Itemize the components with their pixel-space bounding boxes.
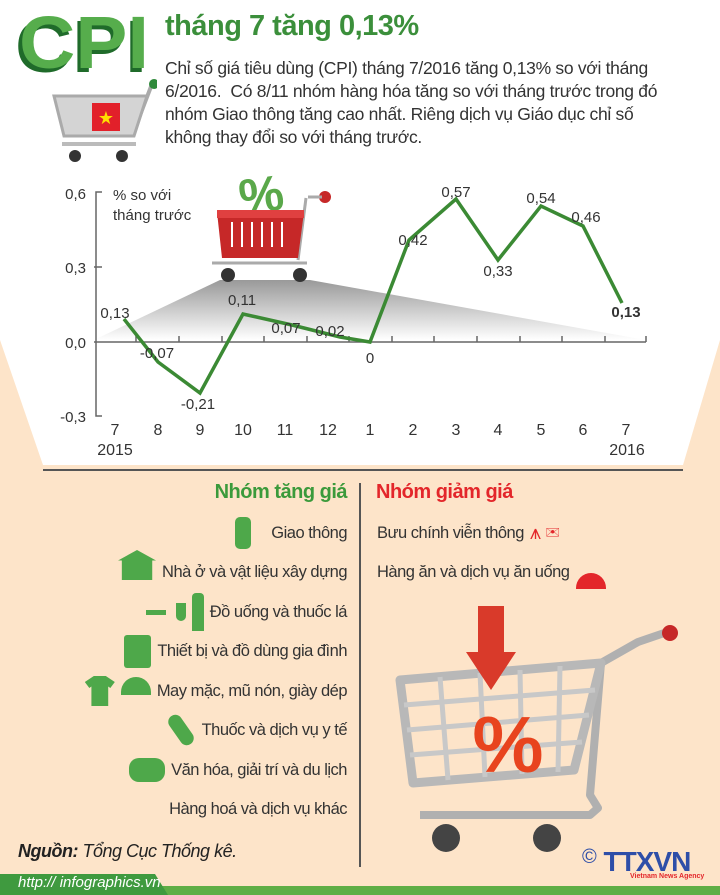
line chart: 2015 bbox=[97, 442, 133, 459]
line chart: -0,07 bbox=[140, 345, 174, 362]
intro text: Chỉ số giá tiêu dùng (CPI) tháng 7/2016 tăng 0,13% so với tháng bbox=[165, 58, 648, 78]
footer url: http:// infographics.vn bbox=[18, 874, 161, 891]
line chart: 0,3 bbox=[65, 260, 86, 277]
logo: TTXVN: © TTXVN bbox=[582, 846, 690, 877]
item: post bbox=[377, 522, 559, 544]
item: appliances bbox=[124, 635, 347, 668]
item: medicine bbox=[168, 714, 348, 746]
item: food: Hàng ăn và dịch vụ ăn uống bbox=[377, 562, 570, 580]
footer bar bbox=[0, 874, 720, 895]
line chart: 0,11 bbox=[228, 292, 256, 309]
line chart: 0,0 bbox=[65, 335, 86, 352]
line chart: 2016 bbox=[609, 442, 645, 459]
item: transport: Giao thông bbox=[271, 524, 347, 542]
item: entertainment bbox=[129, 758, 347, 782]
item: drinks bbox=[146, 593, 348, 631]
line chart: 0,54 bbox=[526, 190, 556, 207]
illustration: big gray cart with percent and down arrow bbox=[396, 606, 678, 852]
line chart: 12 bbox=[319, 422, 337, 439]
logo: CPI with cart bbox=[15, 8, 157, 162]
line chart: 0,42 bbox=[398, 232, 428, 249]
line chart: 4 bbox=[494, 422, 503, 439]
line chart: 0,13 bbox=[611, 304, 641, 321]
line chart: 11 bbox=[277, 422, 293, 439]
line chart: % so với bbox=[113, 187, 171, 204]
line chart: 0,13 bbox=[100, 305, 130, 322]
title: tháng 7 tăng 0,13% bbox=[165, 10, 419, 42]
line chart: 0 bbox=[366, 350, 374, 367]
source: Nguồn: Tổng Cục Thống kê. bbox=[18, 841, 237, 861]
line chart: -0,21 bbox=[181, 396, 215, 413]
line chart: 10 bbox=[234, 422, 252, 439]
item: clothing bbox=[85, 676, 347, 706]
item: entertainment: Văn hóa, giải trí và du lịch bbox=[171, 760, 347, 778]
logo: TTXVN: Vietnam News Agency bbox=[630, 873, 704, 880]
item: post: Bưu chính viễn thông bbox=[377, 524, 524, 542]
line chart: 0,57 bbox=[441, 184, 471, 201]
item: clothing: May mặc, mũ nón, giày dép bbox=[157, 682, 347, 700]
line chart bbox=[60, 184, 647, 459]
icon: red cart with percent: % bbox=[235, 164, 287, 226]
line chart: tháng trước bbox=[113, 207, 192, 224]
line chart: 0,07 bbox=[271, 320, 301, 337]
line chart: 0,33 bbox=[483, 263, 513, 280]
line chart: 2 bbox=[409, 422, 418, 439]
item: drinks: Đồ uống và thuốc lá bbox=[210, 602, 347, 620]
icon: red cart with percent bbox=[212, 164, 331, 282]
intro text: không thay đổi so với tháng trước. bbox=[165, 127, 422, 147]
line chart: 5 bbox=[537, 422, 546, 439]
line chart: 0,46 bbox=[571, 209, 601, 226]
line chart: 8 bbox=[154, 422, 163, 439]
item: other: Hàng hoá và dịch vụ khác bbox=[169, 800, 347, 818]
list: increase items bbox=[85, 517, 348, 818]
line chart: 0,02 bbox=[315, 323, 345, 340]
logo: CPI with cart: ★ bbox=[98, 108, 114, 128]
line chart: 7 bbox=[622, 422, 631, 439]
divider bbox=[359, 483, 361, 867]
illustration: big gray cart with percent and down arrow: % bbox=[472, 700, 544, 789]
heading: decrease group: Nhóm giảm giá bbox=[376, 481, 513, 503]
heading: increase group: Nhóm tăng giá bbox=[215, 481, 347, 503]
intro text bbox=[165, 58, 657, 147]
line chart: 9 bbox=[196, 422, 205, 439]
line chart: 6 bbox=[579, 422, 588, 439]
item: housing bbox=[118, 550, 347, 580]
item: transport bbox=[235, 517, 347, 549]
line chart: 1 bbox=[366, 422, 375, 439]
line chart: 3 bbox=[452, 422, 461, 439]
line chart: -0,3 bbox=[60, 409, 86, 426]
item: housing: Nhà ở và vật liệu xây dựng bbox=[162, 562, 347, 580]
item: medicine: Thuốc và dịch vụ y tế bbox=[202, 720, 347, 738]
item: food bbox=[377, 562, 606, 589]
item: appliances: Thiết bị và đồ dùng gia đình bbox=[157, 642, 347, 660]
intro text: nhóm Giao thông tăng cao nhất. Riêng dịch vụ Giáo dục chỉ số bbox=[165, 104, 633, 124]
intro text: 6/2016. Có 8/11 nhóm hàng hóa tăng so với tháng trước trong đó bbox=[165, 81, 657, 101]
line chart: 0,6 bbox=[65, 186, 86, 203]
item: post: ⩚ ✉ bbox=[530, 522, 559, 544]
line chart: 7 bbox=[111, 422, 120, 439]
list: decrease items bbox=[377, 522, 606, 589]
